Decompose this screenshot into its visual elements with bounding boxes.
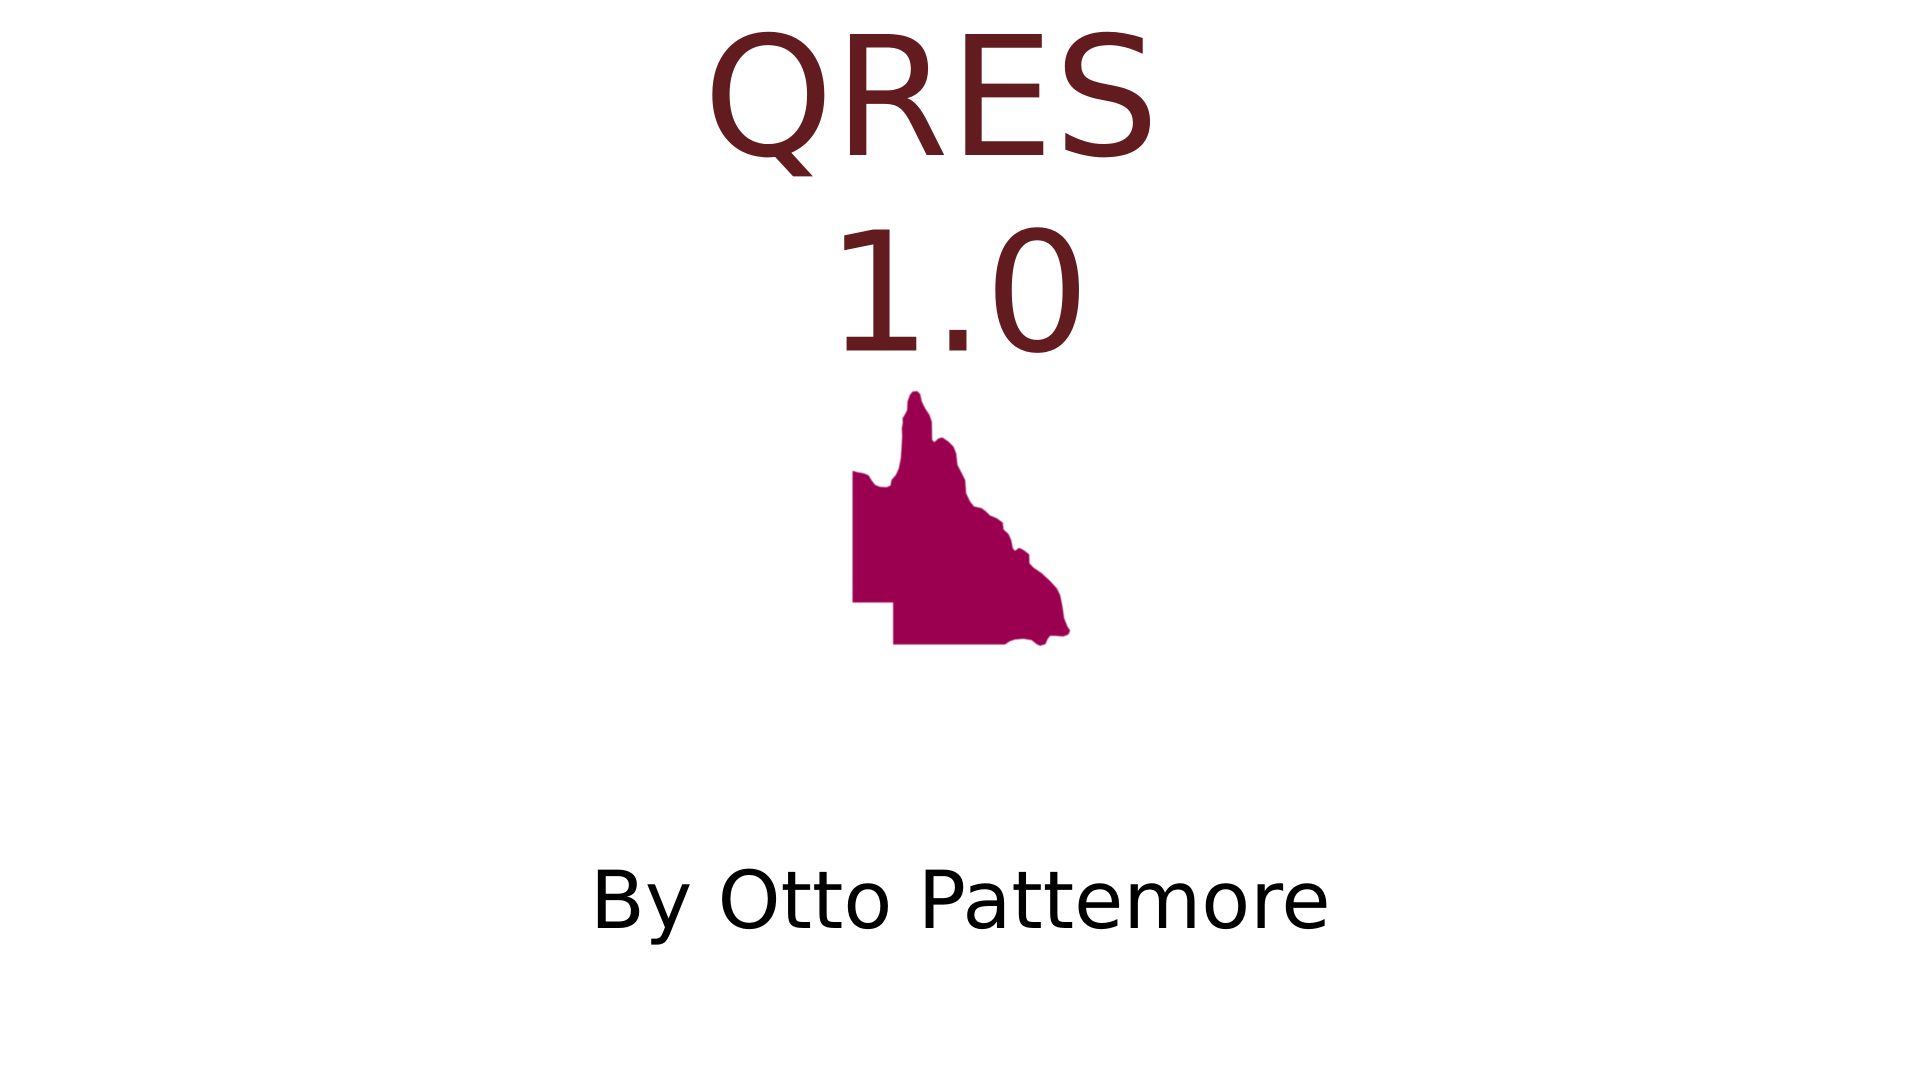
title: QRES: QRES (703, 2, 1159, 195)
icon: Queensland map (853, 391, 1070, 646)
title: version 1.0: 1.0 (826, 198, 1090, 390)
author credit: By Otto Pattemore (590, 854, 1331, 947)
